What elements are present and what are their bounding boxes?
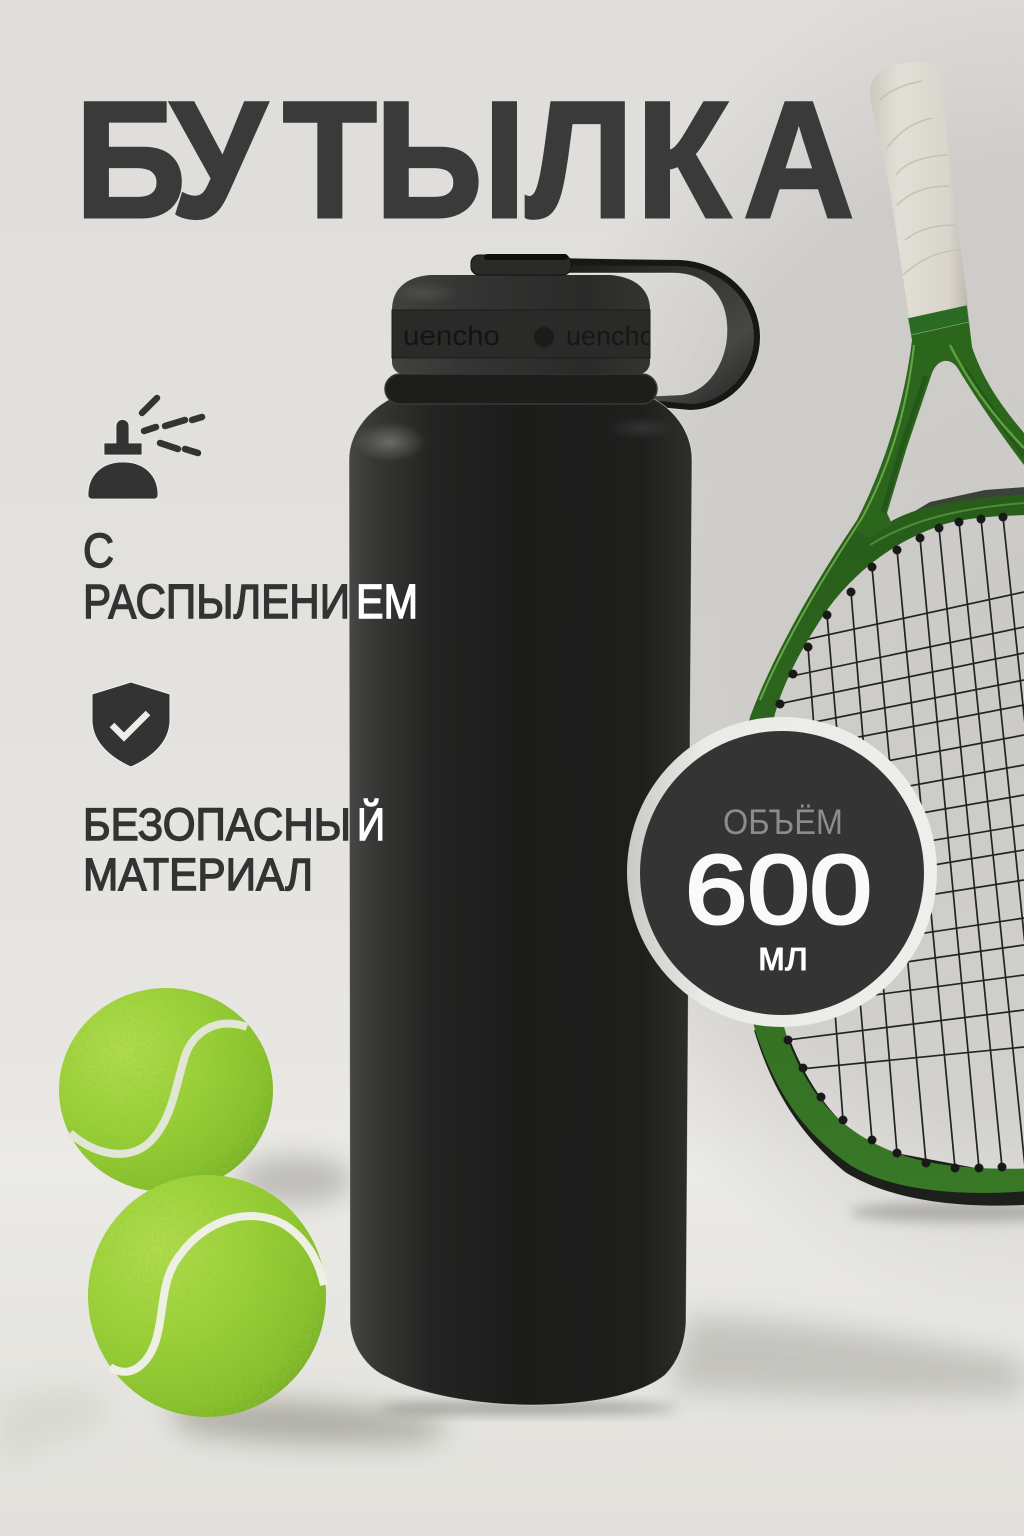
cap band: [392, 310, 650, 358]
racket throat: [852, 305, 1024, 538]
title: БУТЫЛКА: [75, 67, 855, 252]
badge number: 600: [685, 835, 872, 944]
icon: shield with check: [92, 682, 170, 767]
badge label: ОБЪЁМ: [723, 803, 843, 842]
cap brand text right: uencho: [566, 321, 655, 351]
racket string grommets: [776, 512, 1008, 1172]
bottle strap loop: [565, 258, 760, 410]
badge ring: [627, 717, 937, 1027]
badge: volume 600 ml: [627, 717, 937, 1027]
tennis ball front: [88, 1175, 326, 1417]
badge unit: мл: [758, 932, 808, 979]
bottle cap: [392, 275, 650, 374]
racket collar: [908, 305, 969, 335]
water bottle: [349, 254, 760, 1405]
racket frame highlights: [760, 345, 914, 700]
grip tape lines: [880, 81, 962, 275]
feature: spray: [83, 398, 418, 629]
racket frame bumper: [900, 486, 1024, 520]
tennis racket: [739, 62, 1024, 1206]
feature: safe material: [83, 682, 385, 900]
flip top slot: [484, 254, 568, 260]
text: Безопасный материал: [83, 799, 385, 900]
tennis balls: [59, 988, 326, 1417]
tennis ball back: [59, 988, 273, 1192]
text: С распылением: РАСПЫЛЕНИ: [83, 576, 350, 629]
text: С распылением: ЕМ: [356, 576, 418, 629]
text: Безопасный материал: МАТЕРИАЛ: [83, 849, 313, 900]
cap brand logo: [534, 327, 554, 347]
cap highlight: [391, 282, 459, 304]
racket strings: [784, 521, 1024, 1166]
bottle body: [349, 398, 692, 1405]
bottle flip top: [471, 255, 571, 275]
racket throat inner shading: [883, 368, 1024, 512]
floor shadows: [0, 1156, 1024, 1465]
ball seam: [70, 1024, 247, 1154]
badge disc: [640, 731, 924, 1015]
text: Безопасный материал: Й: [357, 799, 385, 850]
text: С распылением: С: [83, 525, 114, 578]
bottle shoulder highlights: [354, 422, 426, 462]
ball seam: [110, 1216, 324, 1372]
text: Безопасный материал: БЕЗОПАСНЫ: [83, 799, 351, 850]
strap outer dark edge: [565, 262, 757, 407]
racket grip: [870, 62, 968, 318]
cap brand text left: uencho: [403, 320, 500, 351]
text: С распылением: [83, 525, 418, 629]
racket frame dark underside: [754, 1030, 1024, 1206]
racket hoop: [739, 494, 1024, 1193]
bottle neck ring: [385, 374, 657, 404]
icon: spray nozzle: [88, 398, 202, 499]
